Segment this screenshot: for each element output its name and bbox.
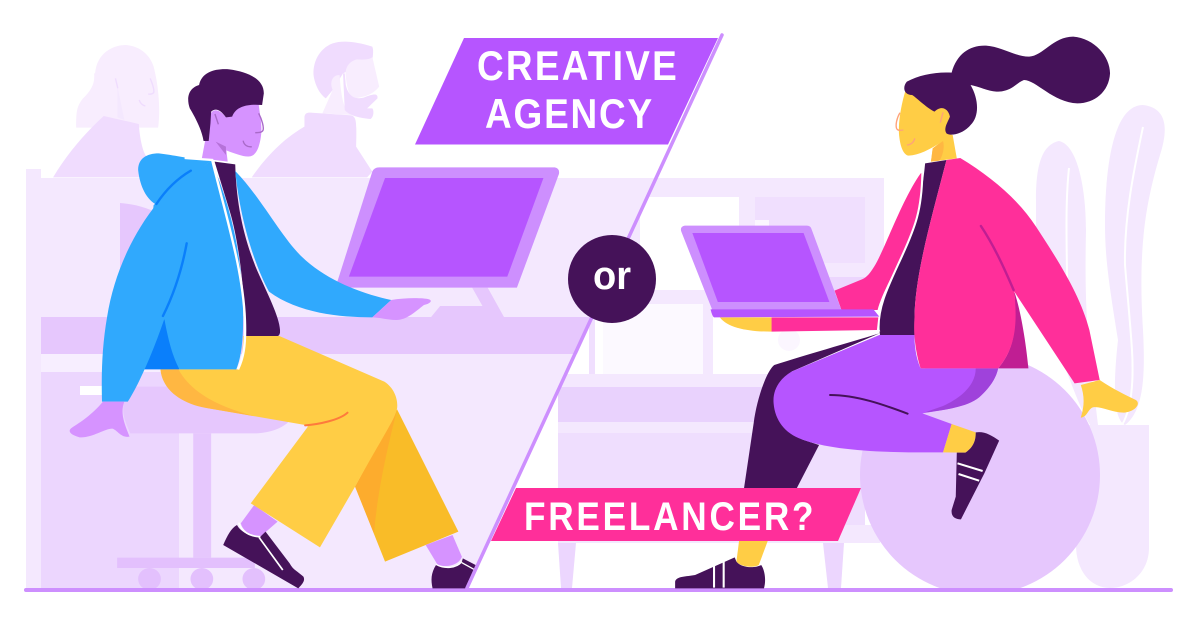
man: jacket base fill <box>143 161 243 369</box>
woman: hand under laptop <box>720 317 772 332</box>
woman: forearm under laptop <box>772 317 878 332</box>
woman: floor shoe stripes <box>714 562 724 588</box>
computer monitor <box>335 167 559 317</box>
man: face lines <box>215 113 263 147</box>
man: neck shadow <box>216 142 226 155</box>
woman: trouser shade <box>924 368 998 413</box>
man: jacket inner shade <box>143 317 179 369</box>
woman: knee crease <box>830 395 908 414</box>
badge text: or <box>593 254 631 298</box>
man: trouser shade <box>161 369 253 416</box>
heading: agency: AGENCY <box>485 91 652 138</box>
banner: freelancer <box>491 488 861 541</box>
woman: raised ankle <box>943 424 976 453</box>
woman: face lines <box>896 112 943 145</box>
figure: freelancer woman with laptop <box>675 37 1138 588</box>
office chair <box>117 387 288 590</box>
laptop screen <box>692 233 829 302</box>
badge: or <box>568 235 656 323</box>
woman: floor shoe <box>675 557 765 588</box>
man: yellow trousers <box>161 336 397 547</box>
background: agency office panel <box>26 169 656 588</box>
man: blue jacket left sleeve <box>102 161 212 402</box>
man: ankle front <box>241 505 278 537</box>
background: freelancer home office shelves and desk <box>558 178 884 588</box>
man: blue right sleeve <box>235 171 391 317</box>
ghost colleague: bearded man <box>252 42 379 177</box>
man: front shoe stripes <box>239 523 283 570</box>
heading: freelancer: FREELANCER? <box>524 494 814 538</box>
laptop base <box>711 309 879 317</box>
man: neck <box>202 140 228 162</box>
man: back leg shade <box>355 409 397 533</box>
woman: purple trousers <box>773 335 998 452</box>
woman: white jacket edge <box>879 173 922 332</box>
woman: pink jacket with right sleeve <box>914 158 1100 383</box>
man: blue jacket body <box>164 161 243 369</box>
man: jacket seams <box>156 171 191 316</box>
man: back shoe stripes <box>436 562 474 569</box>
laptop screen frame <box>681 226 841 310</box>
man: dark shirt <box>215 162 280 336</box>
woman: ponytail hair <box>904 37 1110 135</box>
woman: lower yellow leg <box>736 540 768 567</box>
man: front shoe <box>223 525 304 588</box>
woman: raised shoe <box>952 432 999 519</box>
floor line <box>24 588 1173 592</box>
woman: raised shoe stripes <box>957 463 983 481</box>
man: right hand <box>372 298 431 320</box>
banner: creative agency <box>415 38 718 144</box>
figure: agency man at desk <box>70 69 476 588</box>
woman: dark pink jacket shade <box>998 292 1028 368</box>
woman: neck <box>931 133 957 162</box>
woman: neck shade <box>931 141 944 162</box>
woman: dark shirt <box>879 160 946 335</box>
man: face <box>209 104 261 157</box>
exercise ball <box>860 355 1100 595</box>
man: back shoe <box>432 558 476 588</box>
man: white jacket edge <box>185 158 245 369</box>
woman: sleeve seam <box>981 226 1014 290</box>
background: potted plant <box>1036 105 1165 588</box>
woman: pink left sleeve <box>835 173 922 310</box>
man: blue hood <box>138 153 211 205</box>
man: yellow trousers back leg <box>355 409 458 562</box>
woman: face <box>899 92 952 156</box>
heading: creative: CREATIVE <box>477 43 677 90</box>
diagonal divider line <box>467 35 722 588</box>
man: knee crease <box>305 413 348 425</box>
woman: dark back leg <box>744 333 879 488</box>
man: ankle back <box>426 535 462 566</box>
man: hair <box>188 69 264 141</box>
man: left hand <box>70 402 130 437</box>
ghost colleague: woman <box>53 45 159 177</box>
woman: left hand <box>1081 380 1138 418</box>
